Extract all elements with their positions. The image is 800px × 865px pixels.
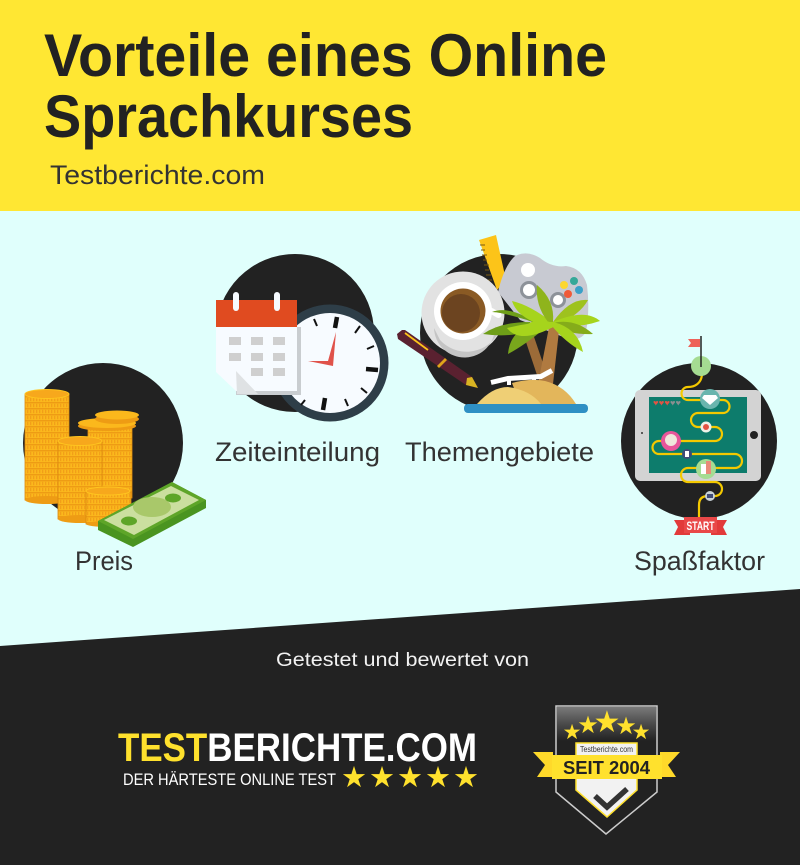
icon: tablet game board [621, 336, 777, 535]
item: Zeiteinteilung [215, 254, 388, 467]
tablet: ♥♥ [670, 398, 681, 408]
badge shield [576, 743, 637, 817]
item: Preis [23, 363, 206, 576]
header band [0, 0, 800, 211]
label: Zeiteinteilung [215, 437, 380, 467]
checkmark [595, 789, 627, 807]
ribbon [533, 752, 553, 777]
brand tagline: DER HÄRTESTE ONLINE TEST [123, 770, 336, 789]
icon: calendar and clock [216, 254, 388, 422]
title: Vorteile eines Online [44, 22, 607, 89]
cash bundle [98, 482, 206, 547]
ruler [479, 235, 506, 290]
brand wordmark: TESTBERICHTE.COM [118, 726, 477, 770]
icon: coffee, controller, palm, pen [397, 235, 600, 413]
tablet: ♥♥♥ [653, 398, 670, 408]
five stars: ★ [397, 762, 423, 794]
footer caption: Getestet und bewertet von [276, 650, 529, 671]
start ribbon [674, 517, 727, 535]
pen [397, 330, 478, 388]
finish flag [688, 336, 701, 367]
five stars: ★ [369, 762, 395, 794]
ribbon text: SEIT 2004 [563, 758, 650, 778]
badge stars: ★ [615, 713, 637, 740]
winding path [653, 373, 742, 518]
label: Preis [75, 546, 133, 576]
clock [272, 304, 388, 422]
palm tree [483, 285, 600, 384]
item: Themengebiete [397, 235, 600, 467]
footer band [0, 589, 800, 865]
game controller [498, 253, 588, 339]
front coin stack [86, 487, 131, 527]
badge stars: ★ [632, 721, 650, 744]
badge stars: ★ [577, 712, 599, 739]
badge name: Testberichte.com [580, 745, 633, 754]
five stars: ★ [425, 762, 451, 794]
badge stars: ★ [594, 706, 620, 739]
middle coin stack [58, 436, 102, 523]
rear coin stack [78, 410, 139, 498]
item: Spaßfaktor [621, 336, 777, 576]
brand logo [118, 726, 479, 794]
five stars: ★ [341, 762, 367, 794]
start ribbon: START [686, 519, 715, 533]
five stars: ★ [453, 762, 479, 794]
tall coin stack [25, 390, 69, 504]
title [44, 22, 607, 150]
label: Spaßfaktor [634, 546, 765, 576]
title: Sprachkurses [44, 83, 413, 150]
coffee cup [422, 272, 504, 358]
tablet [635, 390, 761, 481]
sun lounger [491, 370, 552, 385]
badge: seit 2004 [533, 706, 680, 834]
subtitle: Testberichte.com [50, 160, 265, 190]
badge stars [563, 706, 650, 744]
calendar [216, 292, 301, 395]
label: Themengebiete [405, 437, 594, 467]
five stars [341, 762, 479, 794]
island [464, 380, 588, 413]
game nodes [661, 356, 720, 501]
badge stars: ★ [563, 721, 581, 744]
icon: coins and cash [23, 363, 206, 547]
